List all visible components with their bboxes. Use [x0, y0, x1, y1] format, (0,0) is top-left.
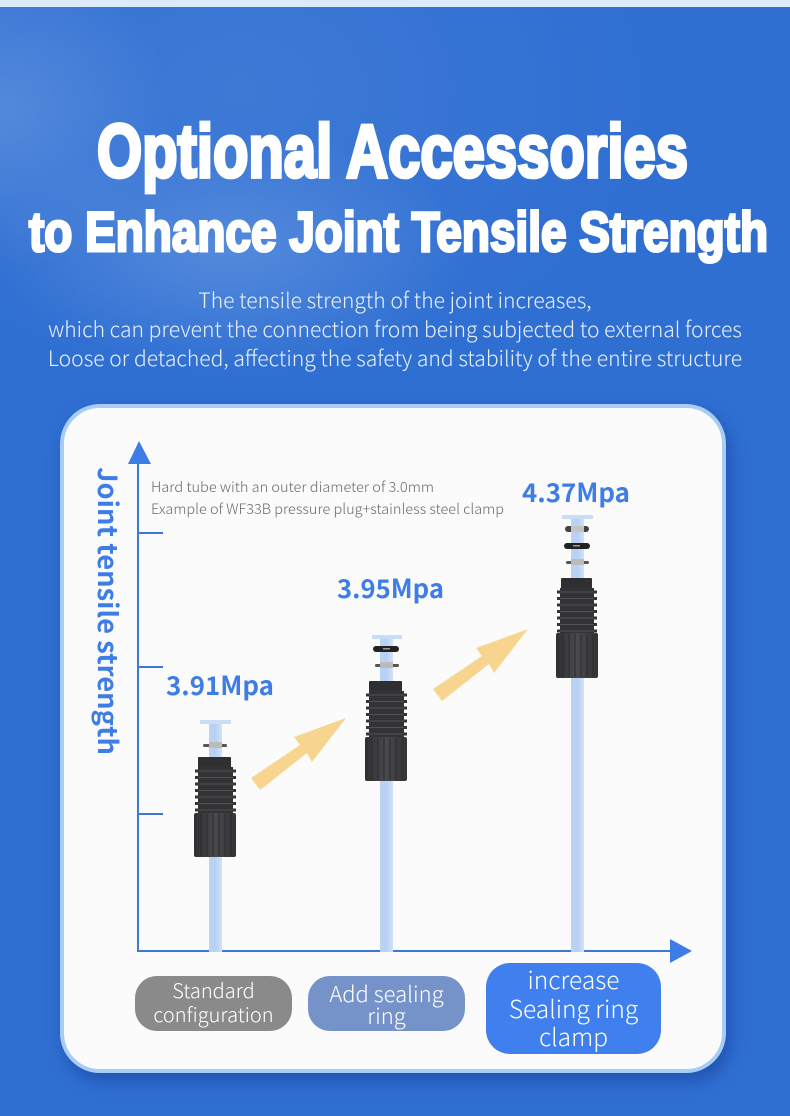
arrow: second step — [433, 629, 528, 701]
pill: increase sealing ring clamp: increase — [528, 962, 619, 997]
pill: standard configuration: configuration — [153, 999, 274, 1028]
note text — [151, 477, 504, 519]
note text: Hard tube with an outer diameter of 3.0mm — [151, 477, 434, 497]
connector: sealing ring and clamp — [556, 515, 598, 952]
y axis — [128, 441, 163, 952]
value labels — [166, 473, 630, 703]
panel: chart card — [60, 404, 726, 1073]
pill: add sealing ring: Add sealing — [329, 977, 444, 1009]
subtitle text — [48, 285, 742, 373]
pill: add sealing ring: ring — [367, 999, 406, 1031]
pill: standard configuration: Standard — [172, 975, 255, 1004]
pill: add sealing ring — [308, 976, 465, 1031]
pill: standard configuration — [135, 976, 292, 1031]
connector: standard — [194, 720, 236, 952]
pill: increase sealing ring clamp — [486, 963, 661, 1054]
pill: increase sealing ring clamp: Sealing ring — [509, 990, 638, 1026]
y axis label: Joint tensile strength — [90, 467, 129, 755]
subtitle text: which can prevent the connection from being subjected to external forces — [48, 314, 742, 344]
value labels: 4.37Mpa — [522, 473, 630, 510]
title — [28, 109, 768, 264]
x axis — [137, 939, 692, 963]
arrow: first step — [251, 718, 346, 790]
value labels: 3.95Mpa — [337, 569, 444, 606]
subtitle text: Loose or detached, affecting the safety and stability of the entire structure — [48, 343, 742, 373]
value labels: 3.91Mpa — [166, 666, 274, 703]
pill: increase sealing ring clamp: clamp — [539, 1019, 608, 1054]
connector: sealing ring — [365, 635, 407, 952]
note text: Example of WF33B pressure plug+stainless steel clamp — [151, 499, 504, 519]
subtitle text: The tensile strength of the joint increases, — [198, 285, 592, 315]
